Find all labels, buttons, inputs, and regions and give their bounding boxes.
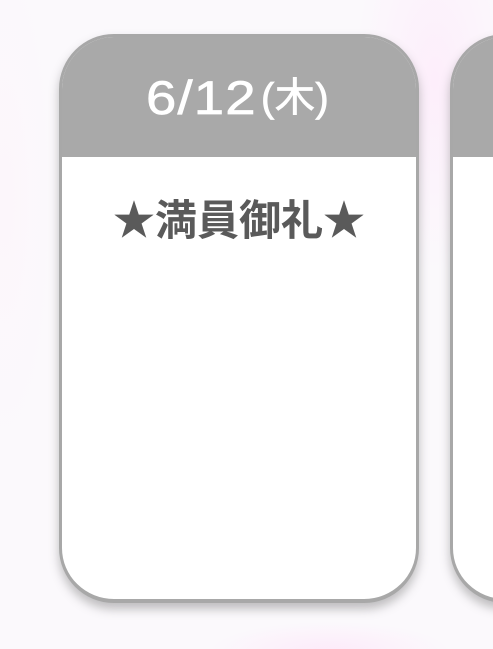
heading: date: (木) [261, 76, 329, 120]
heading: date: 6/12 [146, 71, 257, 124]
text: sold out notice: ★満員御礼★ [113, 197, 365, 244]
card header band [59, 34, 419, 157]
next card header band [450, 34, 493, 157]
heading: date [146, 71, 329, 124]
panel: date card [59, 34, 419, 603]
panel: next card (cropped) [450, 34, 493, 603]
